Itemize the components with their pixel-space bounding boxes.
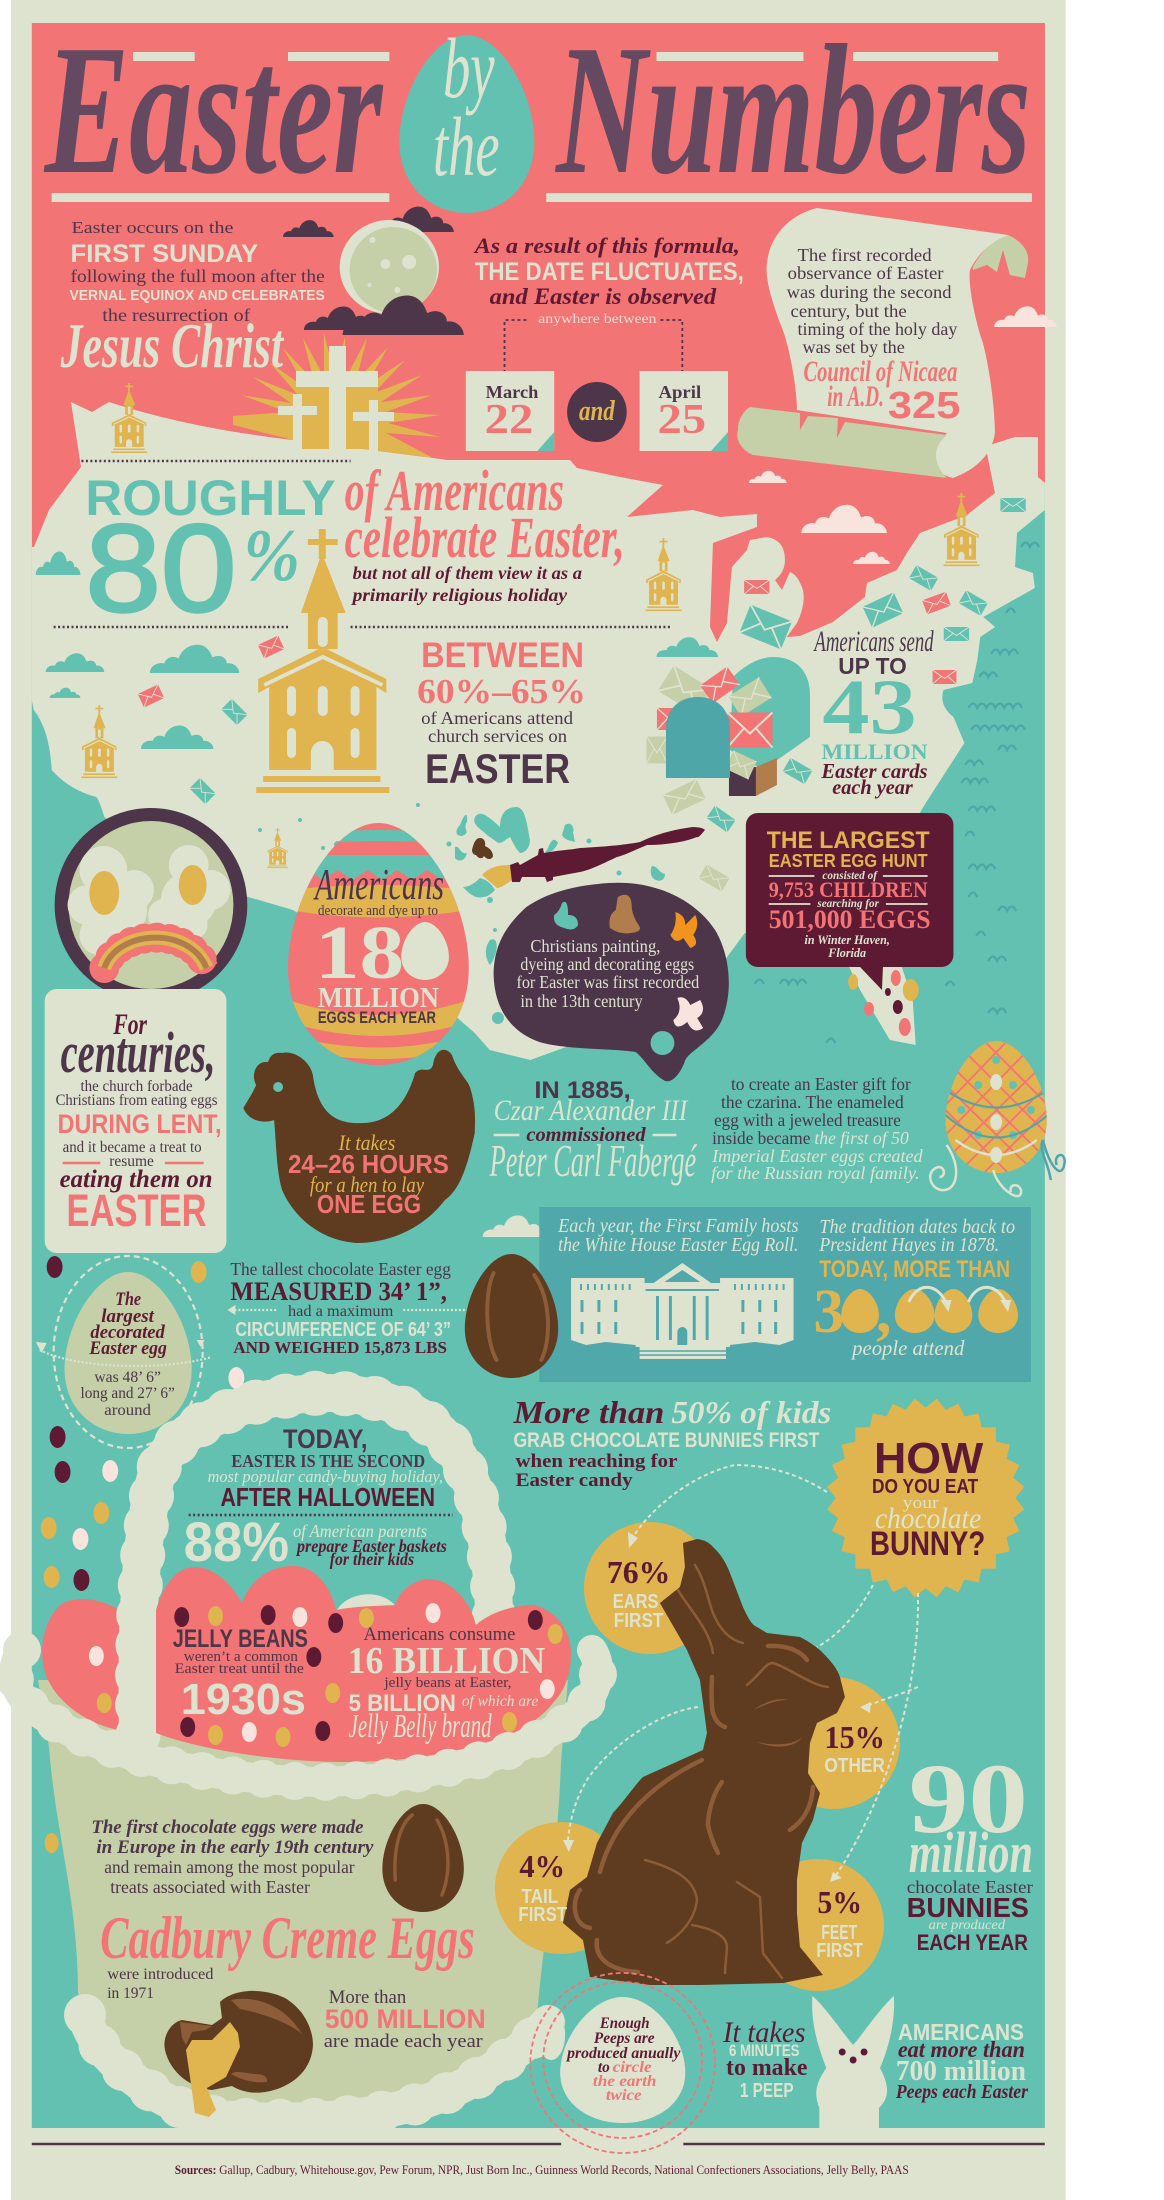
dots: jelly beans left [41, 1256, 244, 1853]
text block: first Sunday: the resurrection of [102, 305, 250, 325]
card: for centuries: the church forbade [80, 1078, 193, 1095]
text block: church attendance: BETWEEN [421, 636, 584, 675]
text block: Easter cards: Easter cards [820, 759, 928, 783]
text block: Imperial eggs: the czarina. The enameled [721, 1092, 904, 1112]
basket: scalloped handle [138, 1393, 494, 1735]
text block: tallest chocolate egg: AND WEIGHED 15,873 LBS [233, 1338, 447, 1357]
text block: 16 billion jelly beans [348, 1624, 545, 1745]
text block: Imperial eggs [711, 1074, 923, 1183]
text block: church attendance: EASTER [425, 745, 570, 792]
bottom rules [32, 2143, 1045, 2145]
text block: 90 million bunnies: EACH YEAR [917, 1930, 1028, 1955]
text block: 90 million bunnies: BUNNIES [907, 1892, 1029, 1923]
card: for centuries: resume [109, 1153, 154, 1170]
scroll: Council of Nicaea: in A.D. [827, 380, 884, 413]
badge: how do you eat your chocolate bunny [827, 1399, 1024, 1597]
text: bunny stat labels: FIRST [614, 1610, 663, 1632]
icon: decorated egg 180 million: Americans [313, 861, 444, 909]
text block: Easter cards: UP TO [838, 653, 907, 679]
callout: largest egg hunt: 9,753 CHILDREN [769, 877, 928, 902]
card: for centuries: For [112, 1008, 147, 1041]
text block: 90 million bunnies: are produced [929, 1918, 1005, 1933]
map: pink north region [32, 23, 1045, 642]
card: April 25: April [658, 382, 701, 402]
icon: largest decorated egg [36, 1256, 212, 1448]
card: April 25 [640, 371, 728, 451]
text block: 16 billion jelly beans: jelly beans at Easter, [383, 1675, 511, 1691]
text block: more than 50 percent of kids: Easter candy [515, 1470, 633, 1491]
text block: first chocolate eggs [91, 1817, 374, 1897]
text block: tallest chocolate egg: The tallest chocolate Easter egg [230, 1259, 451, 1279]
text block: date fluctuates: anywhere between [538, 312, 657, 327]
scroll: Council of Nicaea: 325 [888, 385, 960, 427]
callout: peeps circle the earth [530, 1973, 715, 2153]
icon: tall chocolate egg [465, 1254, 558, 1378]
title: teal egg with by the [399, 21, 534, 213]
basket: handle text: for their kids [330, 1549, 414, 1569]
text block: more than 50 percent of kids: 50% of kids [671, 1395, 831, 1430]
text: bunny stat labels: FEET [821, 1922, 857, 1944]
text block: church attendance: of Americans attend [421, 708, 573, 728]
title: teal egg with by the: the [433, 101, 500, 194]
card: for centuries: eating them on [60, 1166, 213, 1193]
panel: White House Easter Egg Roll: TODAY, MORE THAN [819, 1256, 1010, 1283]
text block: first chocolate eggs: treats associated with Easter [110, 1877, 310, 1897]
title: teal egg with by the: by [443, 21, 495, 116]
callout: peeps circle the earth: produced anually [565, 2045, 681, 2062]
panel: White House Easter Egg Roll [539, 1207, 1031, 1382]
icon: hen with text: for a hen to lay [310, 1172, 424, 1197]
text block: first Sunday: VERNAL EQUINOX AND CELEBRATES [70, 287, 325, 304]
icon: peep bunny [812, 1996, 894, 2135]
text block: Cadbury Creme Eggs: in 1971 [107, 1985, 154, 2002]
text block: more than 50 percent of kids: when reaching for [515, 1451, 677, 1472]
text block: tallest chocolate egg [227, 1259, 502, 1357]
dots: Florida eggs [848, 970, 919, 1036]
callout: peeps circle the earth: circle [613, 2059, 652, 2076]
arrows: dashed paths to circles [563, 1465, 918, 1882]
card: March 22: March [486, 382, 538, 402]
text block: 500 million: More than [329, 1987, 407, 2008]
text block: roughly 80 percent: ROUGHLY [85, 470, 336, 526]
callout: largest egg hunt [746, 813, 953, 990]
text block: Easter cards [813, 625, 934, 799]
text: bunny stat labels: EARS [613, 1591, 658, 1613]
text block: 16 billion jelly beans: 16 BILLION [348, 1640, 545, 1682]
basket: bowl [38, 1680, 568, 2115]
text block: 500 million: are made each year [324, 2031, 483, 2052]
text: bunny stat labels: 76% [607, 1555, 670, 1590]
bubble: painting eggs: for Easter was first recorded [516, 972, 699, 992]
text block: Easter cards: Americans send [813, 625, 934, 658]
callout: largest egg hunt: consisted of [822, 868, 878, 882]
circles: bunny eating stats [495, 1522, 900, 1991]
text block: church attendance: 60%–65% [417, 672, 586, 711]
callout: largest egg hunt: in Winter Haven, [804, 932, 890, 947]
basket: bottom scalloped rim [85, 2015, 548, 2125]
card: for centuries: centuries, [61, 1020, 216, 1085]
callout: largest egg hunt: THE LARGEST [767, 827, 930, 854]
text block: 6 minutes to make a peep: It takes [722, 2016, 805, 2049]
text block: Czar Alexander [489, 1077, 697, 1186]
text block: 700 million peeps [895, 2019, 1028, 2103]
text block: Easter cards: each year [832, 775, 914, 799]
badge: how do you eat your chocolate bunny: HOW [874, 1434, 984, 1483]
text block: 16 billion jelly beans: Americans consume [364, 1624, 515, 1644]
text block: 90 million bunnies: 90 [909, 1743, 1028, 1854]
card: for centuries [45, 989, 226, 1253]
text block: jelly beans history: Easter treat until the [175, 1661, 304, 1677]
text block: Imperial eggs: to create an Easter gift for [731, 1074, 911, 1094]
text block: date fluctuates: and Easter is observed [490, 284, 717, 309]
icon: largest decorated egg: decorated [90, 1322, 165, 1343]
icon: sun rays and crosses [233, 333, 440, 458]
text block: church attendance: church services on [428, 726, 567, 746]
text block: Easter cards: MILLION [821, 739, 928, 764]
icon: hen with text [243, 1050, 475, 1243]
icon: decorated egg 180 million: EGGS EACH YEAR [318, 1008, 436, 1027]
title: Easter: Easter [43, 7, 384, 213]
panel: White House Easter Egg Roll: people attend [850, 1336, 965, 1360]
text block: Imperial eggs: inside became [712, 1128, 810, 1148]
bubble: painting eggs [494, 883, 729, 1081]
callout: largest egg hunt: EASTER EGG HUNT [769, 850, 928, 871]
text block: first Sunday [60, 218, 325, 381]
text block: Imperial eggs: for the Russian royal family. [711, 1163, 920, 1183]
text: bunny stat labels: 5% [817, 1885, 862, 1920]
clouds: pale pink [749, 306, 1057, 564]
paint splash [258, 803, 665, 1024]
icon: hen with text: ONE EGG [317, 1191, 421, 1219]
basket: left jelly bean lobe [42, 1599, 119, 1730]
icon: small church [111, 383, 147, 453]
text block: tallest chocolate egg: had a maximum [288, 1303, 394, 1320]
icon: and circle: and [579, 396, 616, 427]
bubble: painting eggs: dyeing and decorating eggs [520, 954, 694, 974]
text block: jelly beans history: weren’t a common [184, 1649, 298, 1665]
card: for centuries: and it became a treat to [63, 1139, 202, 1156]
icon: paintbrush [463, 827, 705, 898]
text block: church attendance [417, 636, 586, 792]
text block: Czar Alexander: Czar Alexander III [494, 1094, 689, 1127]
map: sea waves [755, 542, 1039, 1043]
icon: decorated egg 180 million [288, 823, 469, 1065]
panel: White House Easter Egg Roll: the White House Easter Egg Roll. [558, 1234, 799, 1256]
panel: White House Easter Egg Roll: President Hayes in 1878. [818, 1234, 999, 1256]
arrows: date brackets [501, 320, 686, 382]
text block: Imperial eggs: Imperial Easter eggs created [711, 1146, 923, 1166]
text block: date fluctuates [473, 233, 744, 327]
card: for centuries: EASTER [67, 1185, 207, 1236]
icon: and circle [567, 382, 627, 442]
text block: roughly 80 percent: % [243, 514, 300, 596]
icon: big church [256, 529, 389, 793]
icon: hen with text: It takes [338, 1130, 395, 1155]
text block: tallest chocolate egg: MEASURED 34’ 1”, [230, 1277, 447, 1306]
icon: hen with text: 24–26 HOURS [288, 1151, 449, 1179]
icon: largest decorated egg: around [104, 1402, 151, 1419]
cloud: White House [483, 1215, 549, 1237]
text block: roughly 80 percent: 80 [85, 500, 236, 638]
text: bunny stat labels: 15% [824, 1720, 885, 1755]
icon: decorated egg 180 million: 180 [315, 912, 449, 995]
icon: Faberge egg [930, 1040, 1065, 1198]
panel: White House Easter Egg Roll: Each year, the First Family hosts [557, 1215, 799, 1237]
text block: jelly beans history: JELLY BEANS [173, 1625, 308, 1653]
panel: White House Easter Egg Roll: The tradition dates back to [819, 1216, 1015, 1238]
text block: first Sunday: following the full moon after the [71, 266, 325, 286]
basket: handle text: AFTER HALLOWEEN [220, 1484, 435, 1512]
callout: largest egg hunt: searching for [816, 896, 879, 910]
text block: 90 million bunnies: chocolate Easter [907, 1877, 1033, 1897]
scroll: Council of Nicaea: Council of Nicaea [803, 355, 957, 388]
text block: Imperial eggs: the first of 50 [814, 1128, 909, 1148]
bubble: painting eggs: in the 13th century [520, 991, 643, 1011]
text block: Cadbury Creme Eggs: Cadbury Creme Eggs [100, 1905, 475, 1971]
icon: moon and clouds [283, 207, 464, 335]
icon: cracked creme egg [164, 1991, 313, 2117]
card: for centuries: Christians from eating eggs [56, 1092, 218, 1109]
card: March 22: 22 [485, 397, 533, 443]
text: bunny stat labels: OTHER [824, 1755, 885, 1777]
text block: date fluctuates: As a result of this formula, [473, 233, 740, 258]
text: bunny stat labels: FIRST [518, 1904, 567, 1926]
text block: 500 million [324, 1987, 486, 2052]
text block: 700 million peeps: eat more than [898, 2037, 1025, 2062]
icons: small churches on map [81, 493, 979, 868]
callout: largest egg hunt: 501,000 EGGS [769, 905, 931, 934]
text block: roughly 80 percent: of Americans [345, 458, 564, 523]
text block: jelly beans history: 1930s [181, 1675, 306, 1724]
scroll: Council of Nicaea: The first recorded [798, 245, 932, 265]
basket: scalloped top rim [14, 1650, 598, 1782]
text block: 16 billion jelly beans: Jelly Belly brand [349, 1708, 492, 1745]
text block: roughly 80 percent: but not all of them view it as a [353, 563, 582, 583]
text block: 6 minutes to make a peep: to make [726, 2055, 807, 2081]
icon: frying pan with eggs and bacon [55, 808, 247, 1002]
title bars [52, 52, 1032, 202]
text block: 90 million bunnies [907, 1743, 1033, 1955]
badge: how do you eat your chocolate bunny: your [903, 1493, 939, 1512]
text block: 700 million peeps: Peeps each Easter [895, 2081, 1028, 2103]
text: bunny stat labels: FIRST [816, 1940, 863, 1962]
text block: roughly 80 percent: celebrate Easter, [345, 505, 625, 570]
text block: Czar Alexander: IN 1885, [534, 1077, 631, 1104]
scroll: Council of Nicaea: timing of the holy day [798, 319, 958, 339]
text: bunny stat labels: TAIL [521, 1886, 558, 1908]
text block: Czar Alexander: Peter Carl Fabergé [489, 1135, 697, 1186]
text block: Czar Alexander: commissioned [526, 1124, 647, 1146]
icon: largest decorated egg: Easter egg [88, 1338, 167, 1359]
text block: more than 50 percent of kids: More than [512, 1395, 664, 1430]
basket: handle text: EASTER IS THE SECOND [231, 1451, 425, 1471]
text: bunny stat labels: 4% [519, 1849, 565, 1884]
text block: 700 million peeps: AMERICANS [898, 2019, 1024, 2045]
text block: first chocolate eggs: The first chocolate eggs were made [91, 1817, 364, 1837]
text block: 6 minutes to make a peep: 1 PEEP [740, 2080, 794, 2102]
divider dots [54, 626, 670, 628]
basket: pink jelly bean mound [156, 1566, 571, 1762]
clouds: teal [36, 551, 718, 749]
text block: 500 million: 500 MILLION [325, 2004, 486, 2034]
icon: largest decorated egg: was 48’ 6” [94, 1369, 161, 1386]
text block: tallest chocolate egg: CIRCUMFERENCE OF 64’ 3” [235, 1319, 451, 1341]
scroll: Council of Nicaea: observance of Easter [788, 263, 944, 283]
scroll: Council of Nicaea: was during the second [787, 282, 952, 302]
scroll: Council of Nicaea: was set by the [802, 337, 905, 357]
text block: Imperial eggs: egg with a jeweled treasure [714, 1110, 901, 1130]
callout: peeps circle the earth: Peeps are [594, 2030, 655, 2047]
callout: largest egg hunt: Florida [827, 945, 867, 960]
text block: first Sunday: FIRST SUNDAY [71, 240, 259, 268]
scroll: Council of Nicaea: century, but the [791, 301, 907, 321]
text block: more than 50 percent of kids [512, 1395, 831, 1491]
icon: decorated egg 180 million: decorate and dye up to [318, 903, 438, 919]
basket: handle text: 88% [184, 1510, 289, 1573]
basket: handle text [184, 1424, 453, 1573]
text block: first chocolate eggs: in Europe in the early 19th century [96, 1837, 374, 1857]
text block: 700 million peeps: 700 million [896, 2056, 1026, 2087]
callout: peeps circle the earth: Enough [599, 2015, 650, 2032]
number: 30,000 with egg zeros: 30,000 [813, 1278, 1014, 1346]
basket: handle text: TODAY, [283, 1424, 367, 1454]
text block: 16 billion jelly beans: of which are [462, 1693, 538, 1710]
map: cream land [32, 400, 1045, 1060]
text: bunny stat labels [518, 1555, 885, 1962]
text block: date fluctuates: THE DATE FLUCTUATES, [475, 258, 744, 286]
dots: jelly beans in basket [89, 1603, 563, 1747]
basket: handle text: of American parents [293, 1521, 427, 1541]
card: for centuries: DURING LENT, [58, 1109, 221, 1139]
icon: largest decorated egg: long and 27’ 6” [80, 1385, 175, 1402]
bubble: painting eggs: Christians painting, [530, 936, 660, 956]
icon: largest decorated egg: The [115, 1289, 141, 1310]
scroll: Council of Nicaea [737, 208, 1028, 478]
text block: jelly beans history [173, 1625, 308, 1724]
text block: Easter cards: 43 [822, 664, 917, 750]
icon: chocolate bunny [563, 1539, 845, 1985]
text block: Cadbury Creme Eggs [100, 1905, 475, 2002]
text block: 16 billion jelly beans: 5 BILLION [349, 1690, 456, 1717]
text block: first Sunday: Easter occurs on the [72, 218, 233, 237]
badge: how do you eat your chocolate bunny: BUNNY? [870, 1525, 985, 1563]
text block: 90 million bunnies: million [909, 1820, 1033, 1885]
basket: handle text: most popular candy-buying holiday, [208, 1467, 443, 1486]
callout: peeps circle the earth: the earth [593, 2073, 657, 2090]
text block: roughly 80 percent: primarily religious holiday [350, 585, 567, 605]
icon: mailbox with envelopes [646, 657, 810, 796]
text block: first chocolate eggs: and remain among the most popular [104, 1857, 355, 1877]
text block: roughly 80 percent [81, 458, 625, 638]
icon: chocolate egg [382, 1804, 464, 1912]
icon: White House [571, 1263, 794, 1359]
text block: 6 minutes to make a peep [722, 2016, 807, 2102]
icon: decorated egg 180 million: MILLION [318, 983, 439, 1014]
icons: envelopes [138, 498, 1026, 892]
callout: peeps circle the earth: twice [606, 2087, 642, 2104]
sources: Sources: Gallup, Cadbury, Whitehouse.gov, Pew Forum, NPR, Just Born Inc., Guinness World Records, National Confectioners Associations, Jelly Belly, PAAS [175, 2162, 909, 2177]
callout: peeps circle the earth: to [598, 2059, 610, 2076]
basket: handle text: prepare Easter baskets [295, 1536, 447, 1556]
badge: how do you eat your chocolate bunny: chocolate [875, 1502, 981, 1535]
text block: Cadbury Creme Eggs: were introduced [107, 1966, 214, 1983]
text block: more than 50 percent of kids: GRAB CHOCOLATE BUNNIES FIRST [513, 1429, 820, 1452]
icon: largest decorated egg: largest [101, 1306, 155, 1327]
card: April 25: 25 [657, 397, 706, 443]
text block: 6 minutes to make a peep: 6 MINUTES [729, 2041, 800, 2060]
card: March 22 [466, 371, 554, 451]
text block: first Sunday: Jesus Christ [60, 310, 285, 381]
badge: how do you eat your chocolate bunny: DO YOU EAT [872, 1476, 978, 1498]
